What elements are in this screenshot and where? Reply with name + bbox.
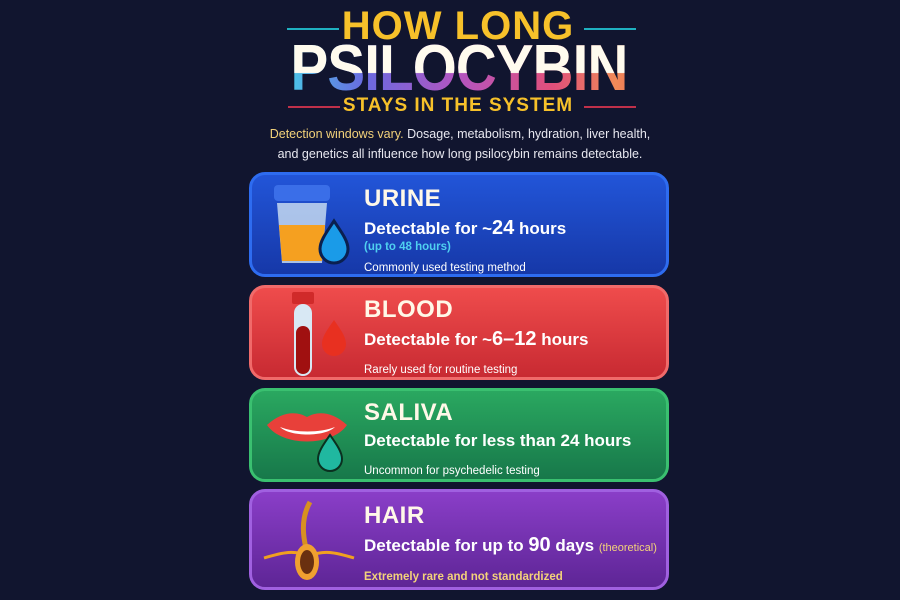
heading: stays in the system: STAYS IN THE SYSTEM bbox=[343, 95, 573, 116]
urine usage: Commonly used testing method bbox=[364, 262, 526, 274]
icon: mouth bbox=[267, 413, 347, 472]
intro text bbox=[270, 127, 650, 161]
blood title: BLOOD bbox=[364, 296, 453, 323]
icon: blood tube bbox=[292, 292, 346, 376]
panel: hair bbox=[249, 489, 669, 590]
hair detection: Detectable for up to 90 days (theoretical) bbox=[364, 534, 657, 556]
saliva title: SALIVA bbox=[364, 399, 453, 426]
urine title: URINE bbox=[364, 185, 441, 212]
title bbox=[287, 4, 636, 116]
panel: urine bbox=[249, 172, 669, 277]
panel: blood bbox=[249, 285, 669, 380]
urine note: (up to 48 hours) bbox=[364, 241, 451, 253]
intro text: and genetics all influence how long psilocybin remains detectable. bbox=[278, 147, 642, 161]
blood detection: Detectable for ~6–12 hours bbox=[364, 328, 588, 350]
icon: hair follicle bbox=[264, 500, 354, 580]
blood usage: Rarely used for routine testing bbox=[364, 364, 517, 376]
panel: saliva bbox=[249, 388, 669, 482]
saliva detection: Detectable for less than 24 hours bbox=[364, 431, 631, 450]
hair title: HAIR bbox=[364, 502, 425, 529]
hair usage: Extremely rare and not standardized bbox=[364, 571, 563, 583]
heading: how long: HOW LONG bbox=[342, 4, 574, 48]
saliva usage: Uncommon for psychedelic testing bbox=[364, 465, 540, 477]
urine detection: Detectable for ~24 hours bbox=[364, 217, 566, 239]
heading: psilocybin bbox=[68, 35, 850, 100]
icon: urine cup bbox=[274, 185, 350, 264]
intro text: Detection windows vary. Dosage, metabolism, hydration, liver health, bbox=[270, 127, 650, 141]
